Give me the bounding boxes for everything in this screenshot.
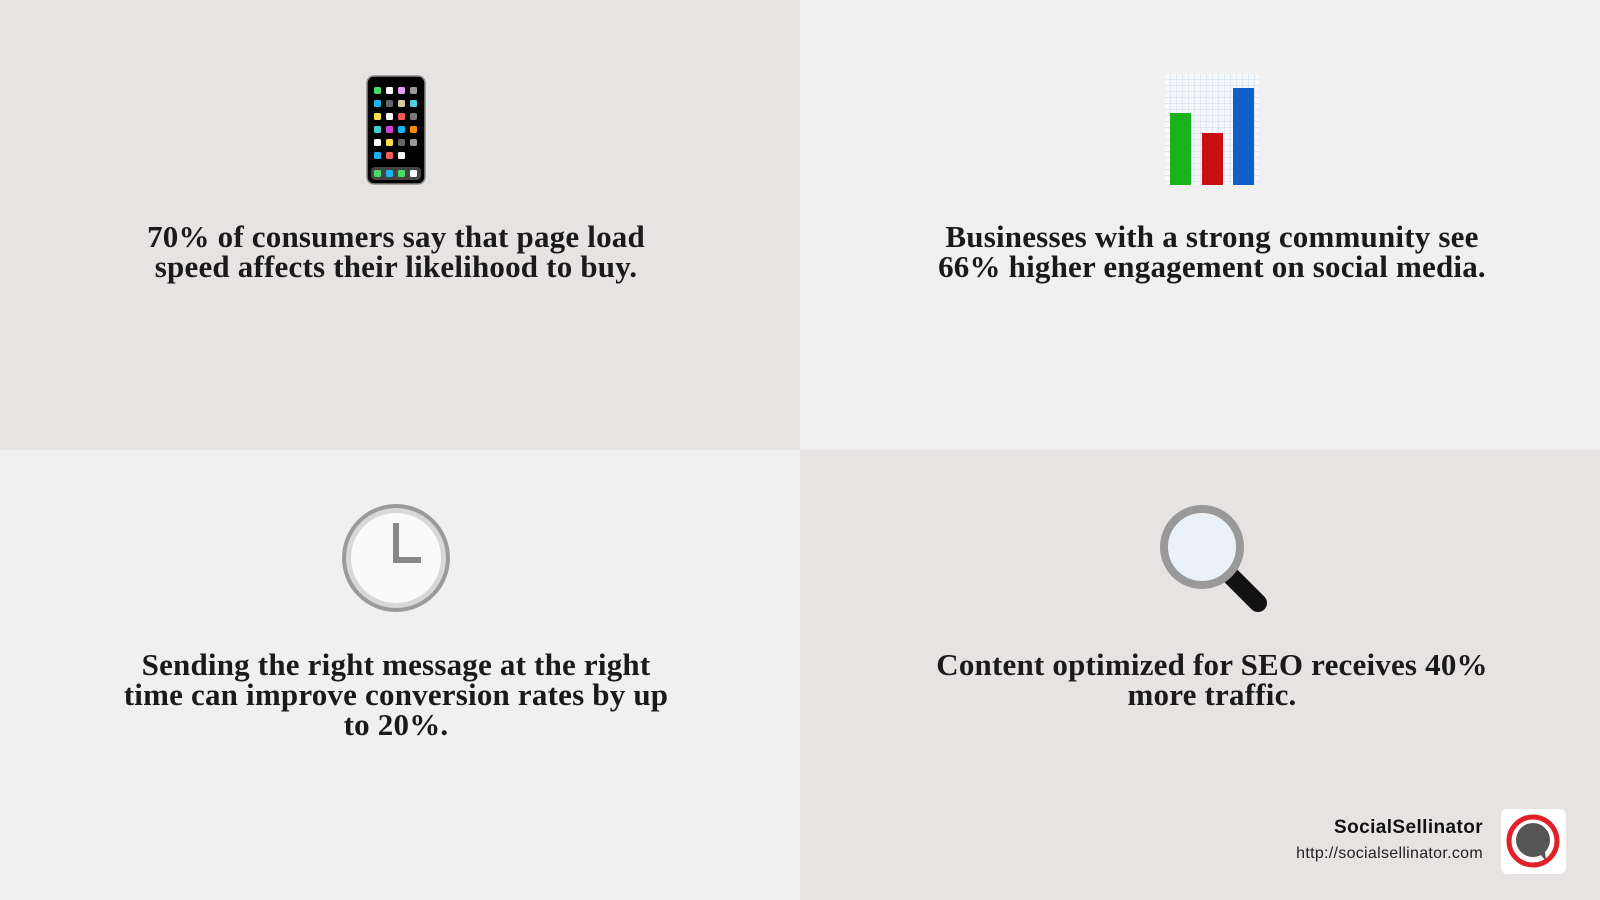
panel: page speed xyxy=(0,0,800,450)
text: SEO stat: Content optimized for SEO receives 40% more traffic. xyxy=(936,647,1488,712)
brand: SocialSellinator xyxy=(1296,809,1566,874)
text: timing stat: Sending the right message at the right time can improve conversion rates by up to 20%. xyxy=(124,647,668,742)
icon: phone xyxy=(366,75,426,185)
brand name: SocialSellinator xyxy=(1334,817,1483,838)
icon: magnifier xyxy=(1160,505,1267,612)
icon: clock xyxy=(342,504,450,612)
text: page speed stat: 70% of consumers say that page load speed affects their likelihood to buy. xyxy=(147,219,645,284)
panel: SEO xyxy=(800,450,1600,900)
logo xyxy=(1501,809,1566,874)
panel: timing xyxy=(0,450,800,900)
icon: bar chart xyxy=(1165,74,1259,185)
brand url: http://socialsellinator.com xyxy=(1296,845,1483,862)
text: community stat: Businesses with a strong community see 66% higher engagement on social media. xyxy=(938,219,1486,284)
panel: community xyxy=(800,0,1600,450)
